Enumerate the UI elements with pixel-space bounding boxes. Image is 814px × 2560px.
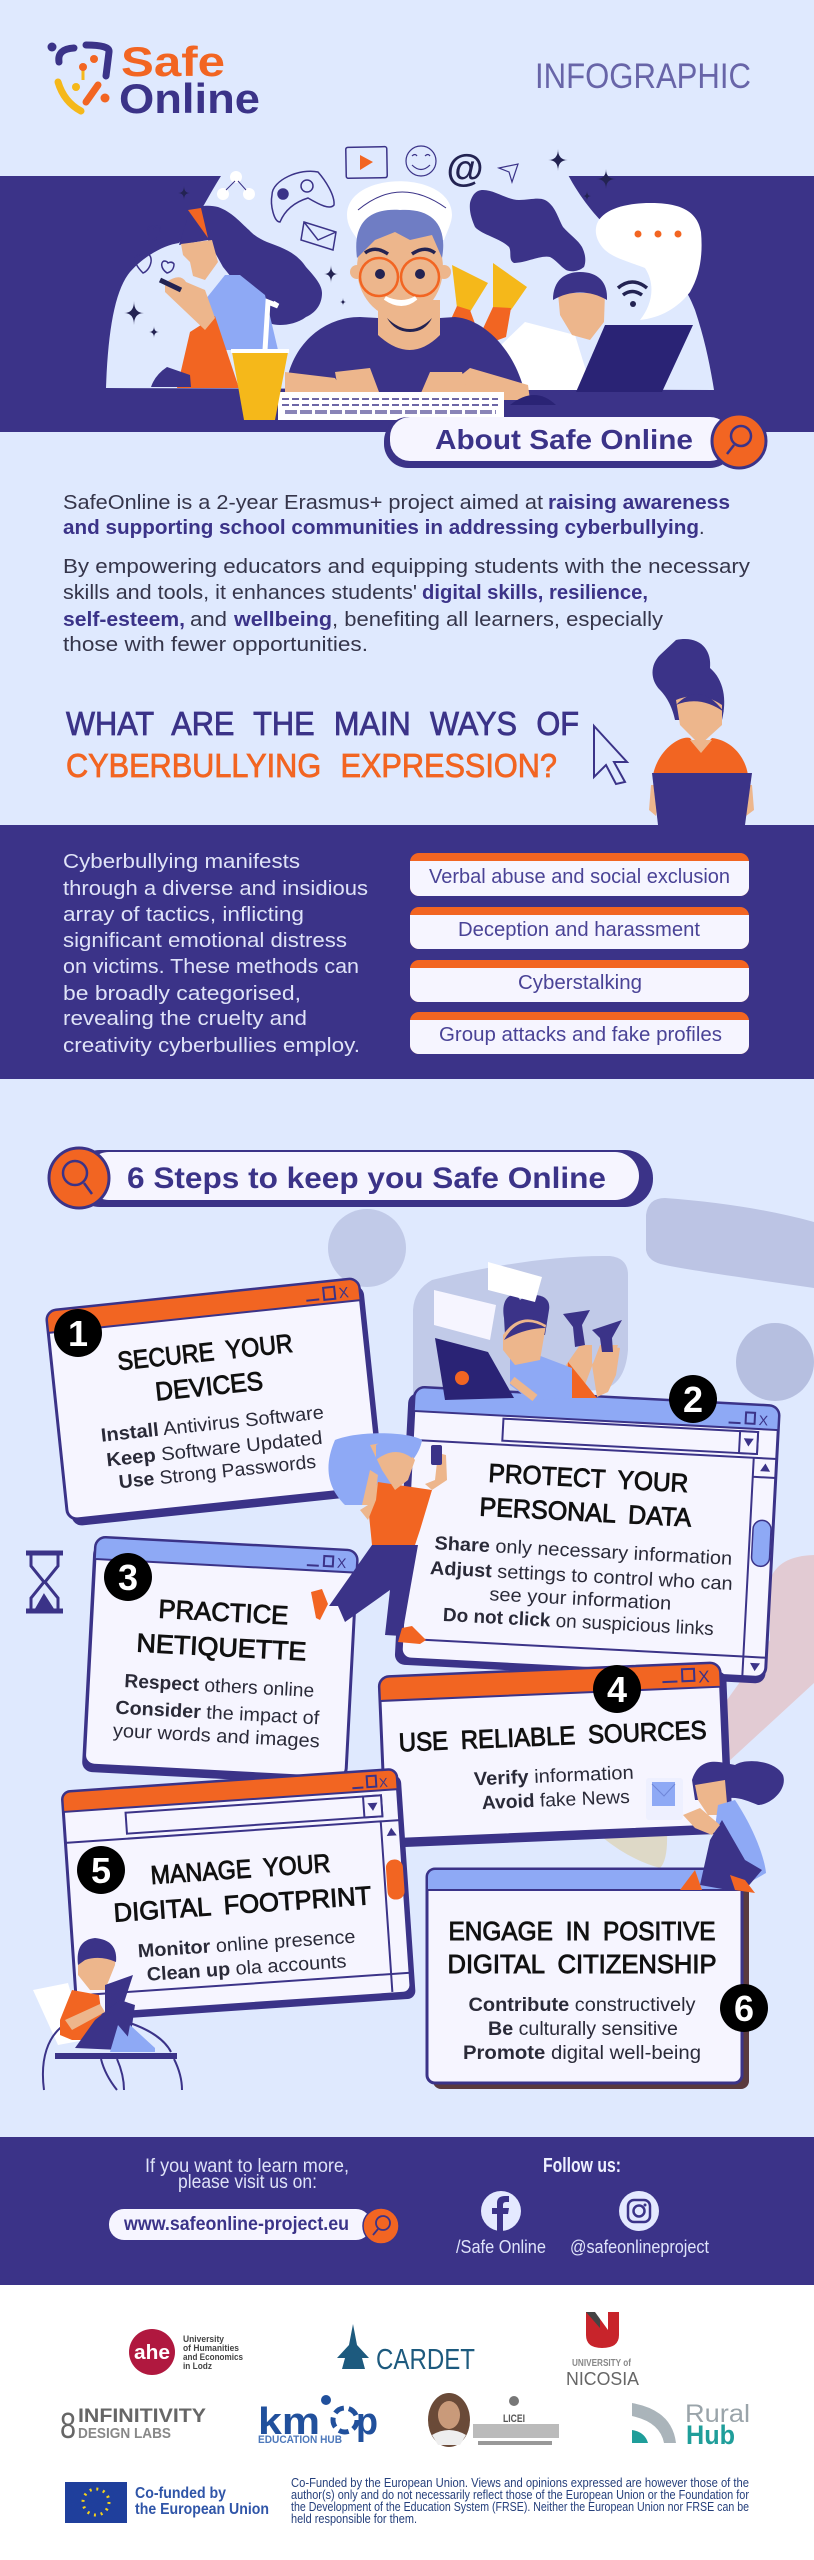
step 6: positive digital citizenship: DIGITAL CITIZENSHIP: [448, 1949, 716, 1979]
figure: central boy with headphones: [285, 181, 530, 400]
background blobs: [328, 1198, 814, 1868]
figure: girl with phone: [311, 1433, 447, 1644]
text block: intro: By empowering educators and equipping students with the necessary: [63, 556, 750, 578]
figure: right girl: [452, 190, 702, 392]
step 1: secure your devices: Keep Software Updated: [105, 1428, 323, 1471]
list item: cyberstalking: Cyberstalking: [518, 972, 642, 994]
logo: ahe: in Lodz: [183, 2361, 212, 2372]
icon: magnifier: [49, 1148, 109, 1208]
heading pill: About Safe Online: [384, 414, 766, 468]
window frame 1: X: [338, 1284, 350, 1302]
text block: intro: SafeOnline is a 2-year Erasmus+ project aimed at: [63, 492, 543, 514]
logo: CARDET: [337, 2324, 475, 2376]
logo: KMOP: [258, 2395, 378, 2446]
list item: cyberstalking: [410, 960, 749, 1002]
text block: description: on victims. These methods can: [63, 956, 359, 978]
step 4: use reliable sources: USE RELIABLE SOURCES: [398, 1715, 707, 1757]
text block: description: array of tactics, inflicting: [63, 904, 304, 926]
window frame 2: X: [758, 1412, 769, 1429]
step 3: practice netiquette: Consider the impact of: [115, 1698, 320, 1729]
window frame 2: [394, 1387, 779, 1684]
text block: disclaimer: Co-Funded by the European Union. Views and opinions expressed are however those of the: [291, 2476, 749, 2490]
heading pill: 6 Steps: 6 Steps to keep you Safe Online: [127, 1162, 606, 1195]
label: facebook handle: /Safe Online: [456, 2237, 546, 2257]
figure: left girl: [151, 206, 322, 388]
logo: ahe: of Humanities: [183, 2343, 239, 2354]
window frame 1: [46, 1278, 385, 1527]
step 5: manage your digital footprint: DIGITAL FOOTPRINT: [113, 1880, 372, 1928]
heading: main ways of cyberbullying: CYBERBULLYING EXPRESSION?: [66, 747, 557, 784]
list item: verbal abuse: [410, 853, 749, 896]
list item: group attacks: Group attacks and fake profiles: [439, 1024, 722, 1046]
text block: disclaimer: author(s) only and do not necessarily reflect those of the European Union or the Foundation for: [291, 2488, 749, 2502]
logo: KMOP: km: [258, 2401, 320, 2443]
icon: envelope: [301, 222, 336, 250]
text block: disclaimer: [291, 2476, 749, 2526]
step 4: use reliable sources: Verify information: [473, 1763, 634, 1790]
step 6: positive digital citizenship: Be culturally sensitive: [488, 2019, 678, 2040]
heading: main ways of cyberbullying: [66, 705, 579, 784]
url search pill: www.safeonline-project.eu: [123, 2214, 349, 2235]
text block: intro: skills and tools, it enhances students': [63, 582, 417, 604]
step 6: positive digital citizenship: [427, 1869, 768, 2089]
logo: Safe Online: Online: [119, 75, 260, 122]
icon: facebook: [481, 2191, 521, 2231]
icon: cursor: [594, 726, 627, 784]
step 4: use reliable sources: Avoid fake News: [481, 1787, 630, 1814]
label: Follow us: Follow us:: [543, 2155, 621, 2177]
badge 3: 3: [118, 1557, 138, 1598]
heading pill: 6 Steps: [49, 1148, 653, 1208]
badge 1: [54, 1309, 102, 1357]
logo: KMOP: EDUCATION HUB: [258, 2434, 342, 2446]
step 1: secure your devices: Install Antivirus Software: [100, 1402, 325, 1447]
step 1: secure your devices: DEVICES: [154, 1365, 264, 1407]
text block: disclaimer: held responsible for them.: [291, 2512, 417, 2526]
text block: intro: .: [699, 517, 705, 539]
logo: Infinitivity Design Labs: [60, 2405, 206, 2446]
logo: Safe Online: [48, 38, 260, 122]
mouse: [510, 395, 556, 405]
step 2: protect your personal data: Share only necessary information: [434, 1533, 733, 1570]
logo: University of Nicosia: [566, 2312, 639, 2389]
window frame 5: [62, 1769, 416, 2021]
badge 4: [593, 1665, 641, 1713]
logo: Rural Hub: Hub: [686, 2420, 735, 2450]
icon: gamepad: [271, 171, 334, 222]
list item: verbal abuse: Verbal abuse and social exclusion: [429, 866, 730, 888]
step 2: protect your personal data: [394, 1375, 779, 1684]
text block: intro: and: [190, 609, 227, 631]
list item: deception: [410, 907, 749, 949]
window frame 3: [82, 1537, 358, 1785]
icon: mail bubble: [646, 1778, 683, 1820]
icon: at sign: @: [446, 148, 484, 190]
step 3: practice netiquette: your words and images: [112, 1721, 320, 1752]
icon: smiley: [406, 146, 436, 176]
logo: Safe Online: Safe: [121, 38, 225, 85]
window frame 4: [379, 1662, 733, 1848]
text: learn more: If you want to learn more,: [145, 2156, 349, 2177]
heading: main ways of cyberbullying: WHAT ARE THE MAIN WAYS OF: [66, 705, 579, 742]
keyboard: [278, 392, 504, 420]
step 3: practice netiquette: Respect others online: [124, 1671, 315, 1702]
step 3: practice netiquette: [82, 1537, 358, 1785]
icon: drink cup with straw: [231, 302, 289, 420]
text: learn more: [145, 2156, 349, 2193]
step 1: secure your devices: SECURE YOUR: [116, 1328, 294, 1376]
logo: Infinitivity Design Labs: 8: [60, 2405, 76, 2446]
step 5: manage your digital footprint: Monitor online presence: [137, 1927, 356, 1962]
label: co-funded: Co-funded by: [135, 2485, 226, 2502]
step 4: use reliable sources: [379, 1662, 733, 1848]
icon: magnifier: [712, 414, 766, 468]
text block: description: revealing the cruelty and: [63, 1008, 307, 1030]
text block: intro: those with fewer opportunities.: [63, 634, 368, 656]
step 1: secure your devices: [46, 1278, 385, 1527]
step 6: positive digital citizenship: ENGAGE IN POSITIVE: [448, 1916, 716, 1946]
icon: hourglass: [26, 1553, 63, 1611]
badge 6: [720, 1984, 768, 2032]
label: INFOGRAPHIC: INFOGRAPHIC: [535, 57, 751, 96]
icon: sparkles: [124, 149, 616, 338]
text block: intro: digital skills, resilience,: [422, 582, 648, 604]
text block: description: creativity cyberbullies employ.: [63, 1035, 360, 1057]
logo: EU flag: [65, 2482, 127, 2523]
text block: intro: and supporting school communities in addressing cyberbullying: [63, 517, 699, 539]
logo: Rural Hub: Rural: [685, 2400, 750, 2428]
footer panel: [0, 2137, 814, 2285]
logo: Licei: [428, 2393, 559, 2447]
icon: network nodes: [217, 171, 255, 200]
logo: ahe: and Economics: [183, 2352, 243, 2363]
badge 6: 6: [734, 1988, 754, 2029]
step 2: protect your personal data: see your information: [489, 1584, 672, 1615]
panel: cyberbullying ways: [0, 825, 814, 1079]
figure: girl lying with laptop: [434, 1262, 622, 1400]
logo: University of Nicosia: NICOSIA: [566, 2369, 639, 2389]
badge 2: 2: [683, 1379, 703, 1420]
step 2: protect your personal data: Adjust settings to control who can: [429, 1558, 733, 1595]
badge 5: [77, 1846, 125, 1894]
logo: CARDET: CARDET: [376, 2344, 475, 2376]
figure: girl sitting on window 6: [646, 1761, 784, 1893]
logo: Licei: LICEI: [503, 2413, 525, 2425]
label: instagram handle: @safeonlineproject: [570, 2237, 709, 2257]
logo: Infinitivity Design Labs: DESIGN LABS: [78, 2425, 171, 2442]
label: co-funded: [135, 2485, 269, 2518]
text block: description: be broadly categorised,: [63, 983, 301, 1005]
window frame 6: [427, 1869, 749, 2089]
list item: deception: Deception and harassment: [458, 919, 700, 941]
figure: boy on chair with tablet: [33, 1938, 182, 2090]
badge 5: 5: [91, 1850, 111, 1891]
icon: hearts: [135, 226, 174, 273]
icon: instagram: [619, 2191, 659, 2231]
hero illustration: [0, 146, 814, 432]
step 2: protect your personal data: Do not click on suspicious links: [442, 1605, 714, 1640]
icon: play box: [346, 147, 387, 178]
text block: intro: wellbeing: [233, 609, 332, 631]
text block: description: [63, 851, 368, 1057]
badge 3: [104, 1553, 152, 1601]
text block: intro: [63, 492, 750, 656]
text block: description: significant emotional distress: [63, 930, 347, 952]
label: co-funded: the European Union: [135, 2501, 269, 2518]
step 5: manage your digital footprint: [62, 1769, 416, 2021]
icon: paper plane: [499, 164, 518, 182]
logo: ahe: [129, 2329, 243, 2375]
step 1: secure your devices: Use Strong Passwords: [118, 1452, 317, 1493]
step 2: protect your personal data: PROTECT YOUR: [488, 1458, 689, 1498]
badge 2: [669, 1375, 717, 1423]
logo: University of Nicosia: UNIVERSITY of: [572, 2358, 632, 2369]
step 5: manage your digital footprint: Clean up ola accounts: [146, 1951, 347, 1986]
step 6: positive digital citizenship: Promote digital well-being: [463, 2043, 701, 2064]
text: learn more: please visit us on:: [178, 2172, 317, 2193]
text block: description: through a diverse and insidious: [63, 878, 368, 900]
heading pill: About Safe Online: About Safe Online: [435, 424, 693, 455]
step 5: manage your digital footprint: MANAGE YOUR: [150, 1848, 331, 1890]
figure: woman with laptop: [649, 639, 754, 825]
text block: intro: , benefiting all learners, especially: [332, 609, 663, 631]
step 3: practice netiquette: PRACTICE: [158, 1594, 289, 1630]
step 3: practice netiquette: NETIQUETTE: [136, 1628, 307, 1666]
badge 1: 1: [68, 1313, 88, 1354]
badge 4: 4: [607, 1669, 627, 1710]
logo: ahe: University: [183, 2334, 225, 2345]
logo: ahe: ahe: [134, 2342, 170, 2364]
logo: Rural Hub: [632, 2400, 750, 2450]
url search pill: [109, 2208, 399, 2244]
text block: description: Cyberbullying manifests: [63, 851, 300, 873]
window frame 3: X: [337, 1555, 347, 1571]
step 6: positive digital citizenship: Contribute constructively: [468, 1995, 696, 2016]
logo: Infinitivity Design Labs: INFINITIVITY: [78, 2406, 206, 2427]
partner logos: [0, 2285, 814, 2560]
window frame 4: X: [698, 1667, 710, 1687]
step 2: protect your personal data: PERSONAL DATA: [479, 1491, 693, 1533]
window frame 5: X: [379, 1775, 389, 1790]
text block: intro: raising awareness: [548, 492, 730, 514]
logo: KMOP: p: [356, 2401, 378, 2443]
text block: intro: self-esteem,: [63, 609, 185, 631]
list item: group attacks: [410, 1012, 749, 1054]
